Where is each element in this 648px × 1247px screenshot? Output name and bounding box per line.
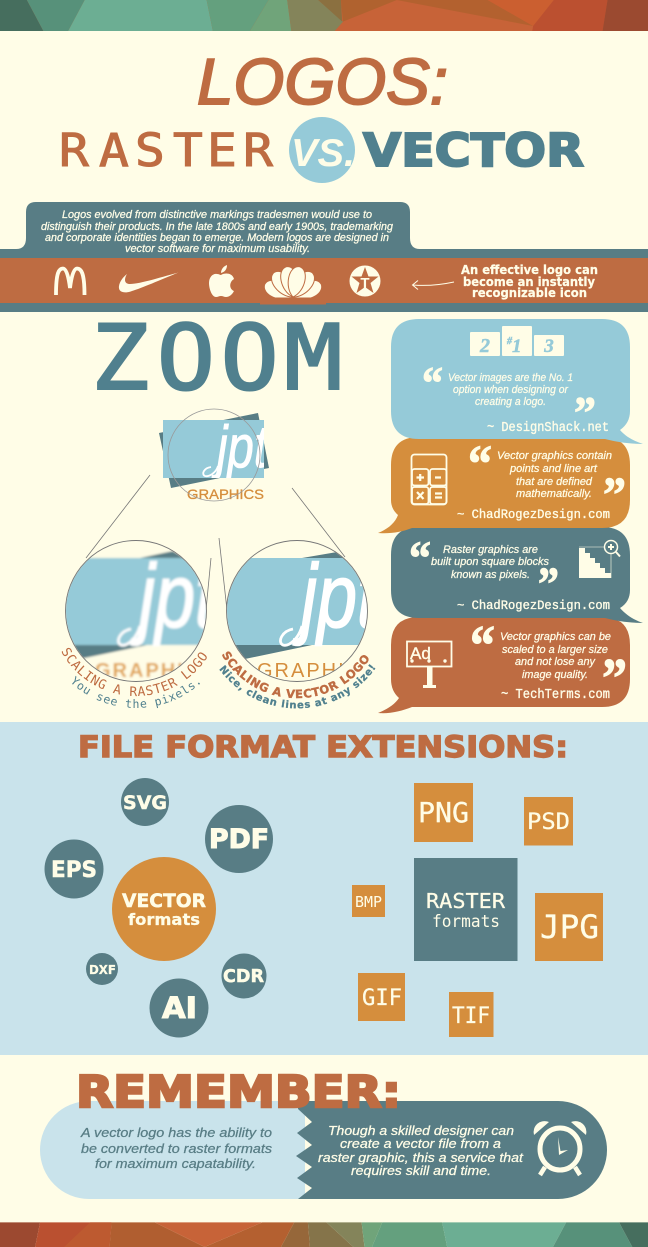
callout text: become an instantly (463, 274, 595, 289)
icon: golden arches (56, 268, 84, 295)
icon: swoosh (119, 272, 178, 292)
sample logo: jpt (211, 414, 269, 480)
quote bubble: design shack: option when designing or (453, 384, 569, 396)
intro text panel: vector software for maximum usability. (125, 243, 310, 255)
vs badge (289, 117, 355, 183)
callout text: recognizable icon (472, 285, 587, 300)
panel: file format extensions (0, 722, 648, 1055)
vector formats cluster: VECTOR (122, 890, 206, 912)
raster formats cluster: TIF (452, 1004, 490, 1029)
right text: raster graphic, this a service that (318, 1150, 525, 1165)
raster formats cluster: PNG (418, 797, 469, 829)
logo strip (0, 258, 648, 312)
icon: peacock (260, 265, 326, 305)
raster formats cluster: JPG (540, 908, 599, 946)
raster magnified circle (65, 540, 207, 682)
quote bubble: TechTerms: Vector graphics can be (500, 631, 611, 643)
quote bubble: TechTerms: and not lose any (515, 656, 596, 668)
vector formats cluster: DXF (89, 963, 116, 977)
quote bubble: vector math: ” (603, 466, 626, 522)
icon: billboard: Ad (410, 644, 431, 663)
icon: podium: 3 (543, 336, 554, 357)
icon: podium (470, 326, 564, 357)
icon: podium: # (506, 336, 513, 347)
raster formats cluster: formats (432, 912, 500, 932)
quote bubble: raster pixels (391, 527, 643, 623)
icon: pixel stairs with magnifier (579, 540, 620, 578)
icon: star badge: T (360, 275, 370, 292)
quote bubble: raster pixels: Raster graphics are (443, 544, 538, 556)
quote bubble: vector math: Vector graphics contain (497, 450, 612, 462)
pill: right half (296, 1101, 607, 1199)
vector magnified circle: jpt (292, 547, 380, 647)
icon: billboard (407, 642, 452, 688)
vector formats cluster: EPS (51, 858, 97, 883)
quote bubble: TechTerms (378, 615, 630, 713)
quote bubble: design shack: creating a logo. (475, 396, 546, 408)
callout text (461, 262, 598, 300)
vector formats cluster: formats (128, 910, 200, 929)
icon: apple (209, 265, 234, 297)
vs badge: VS. (291, 132, 355, 175)
quote bubble: vector math: that are defined (516, 476, 593, 488)
subtitle: Vector: VECTOR (363, 124, 584, 177)
quote bubble: raster pixels: “ (409, 532, 431, 585)
right text (318, 1123, 525, 1178)
curved caption: vector: Nice, clean lines at any size! (219, 664, 376, 708)
vector formats cluster (44, 778, 273, 1038)
intro text panel: distinguish their products. In the late 1800s and early 1900s, trademarking (41, 221, 394, 233)
arrow (412, 280, 454, 290)
quote bubble: raster pixels: ” (538, 558, 559, 611)
intro text panel: and corporate identities began to emerge. Modern logos are designed in (45, 232, 389, 244)
icon: star badge (350, 266, 380, 296)
quote bubble: vector math (378, 436, 630, 533)
quote bubble: TechTerms: image quality. (522, 669, 588, 681)
curved caption: raster: SCALING A RASTER LOGO (62, 648, 207, 696)
right text: requires skill and time. (351, 1163, 491, 1178)
curved caption: vector: SCALING A VECTOR LOGO (222, 651, 369, 698)
quote bubble: design shack: “ (422, 357, 443, 408)
title: Logos: LOGOS: (197, 45, 448, 118)
right text: Though a skilled designer can (328, 1123, 514, 1138)
bottom polygon band (0, 1222, 648, 1247)
quote bubble: vector math: ~ ChadRogezDesign.com (457, 508, 610, 522)
sample logo (159, 409, 269, 502)
left text (80, 1125, 273, 1171)
heading: FILE FORMAT EXTENSIONS: (78, 730, 568, 764)
callout text: An effective logo can (461, 262, 598, 277)
raster magnified circle: jpt (130, 547, 218, 647)
icon: podium: 2 (479, 335, 490, 357)
curved caption: raster: You see the pixels. (72, 676, 200, 708)
vector formats cluster: CDR (223, 966, 264, 987)
intro text panel: Logos evolved from distinctive markings tradesmen would use to (62, 209, 372, 221)
quote bubble: design shack (391, 319, 643, 444)
quote bubble: raster pixels: known as pixels. (451, 569, 530, 581)
intro text panel (0, 202, 648, 259)
quote bubble: design shack: ” (574, 387, 596, 438)
pill: left half (40, 1101, 305, 1199)
quote bubble: vector math: “ (468, 436, 492, 493)
sample logo: GRAPHICS (187, 486, 264, 502)
heading: Zoom: ZOOM (91, 306, 343, 411)
quote bubble: TechTerms: ~ TechTerms.com (501, 687, 610, 703)
icon: calculator (412, 454, 446, 504)
raster formats cluster: PSD (527, 810, 570, 835)
panel: remember (40, 1067, 607, 1199)
icon: podium: 1 (512, 336, 522, 357)
left text: A vector logo has the ability to (80, 1125, 272, 1140)
left text: for maximum capatability. (95, 1156, 256, 1171)
quote bubble: design shack: ~ DesignShack.net (487, 421, 609, 436)
left text: be converted to raster formats (81, 1141, 273, 1156)
right text: create a vector file from a (340, 1136, 501, 1151)
quote bubble: vector math: mathematically. (516, 488, 592, 500)
raster formats cluster (352, 783, 603, 1037)
quote bubble: raster pixels: built upon square blocks (431, 556, 549, 568)
vector magnified circle (226, 540, 368, 682)
raster formats cluster: RASTER (426, 889, 506, 913)
vector formats cluster: SVG (123, 792, 167, 814)
quote bubble: raster pixels: ~ ChadRogezDesign.com (457, 599, 610, 613)
icon: alarm clock (534, 1121, 586, 1175)
top polygon band (0, 0, 648, 31)
raster magnified circle: GRAPHICS (95, 660, 217, 682)
quote bubble: design shack: Vector images are the No. 1 (448, 372, 573, 384)
quote bubble: TechTerms: “ (470, 615, 495, 677)
zoom guide lines (86, 475, 345, 610)
subtitle: Raster: RASTER (59, 125, 273, 177)
quote bubble: vector math: points and line art (509, 463, 598, 475)
vector formats cluster: PDF (209, 824, 269, 855)
vector magnified circle: GRAPHICS (257, 660, 377, 682)
vector formats cluster: AI (162, 991, 197, 1025)
raster formats cluster: GIF (362, 986, 402, 1011)
quote bubble: TechTerms: scaled to a larger size (502, 644, 608, 656)
heading: REMEMBER: (76, 1067, 401, 1118)
raster formats cluster: BMP (355, 893, 382, 911)
quote bubble: TechTerms: ” (602, 648, 627, 710)
